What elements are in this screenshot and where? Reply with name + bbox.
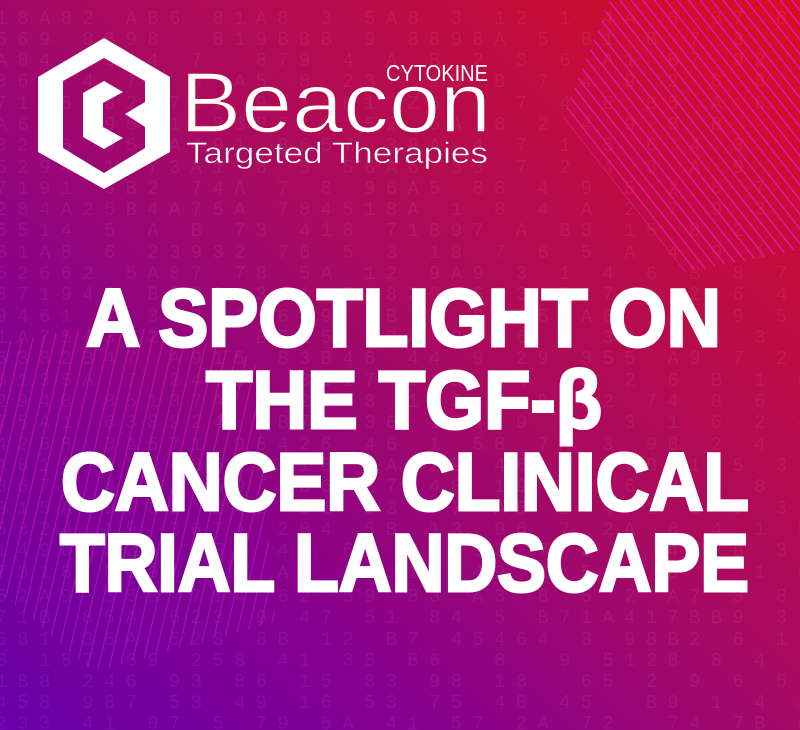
background pattern of faint characters: 294B 85137A 6 2948 153 7 B 22 74 8 6 3 [0, 391, 800, 413]
title: CANCER CLINICAL [61, 437, 749, 528]
title: A SPOTLIGHT ON [86, 273, 721, 364]
background pattern of faint characters: 6514 5 A B 73 418 71B97 A B3 15 8 2 [0, 220, 754, 242]
title [60, 273, 749, 609]
striped hexagon: bottom left [0, 326, 274, 671]
logo tagline: Targeted Therapies: Targeted Therapies [186, 137, 488, 170]
logo word: Cytokine: CYTOKINE [386, 60, 488, 86]
background pattern of faint characters: 7191 5B2 74A 7 8 96A5 88 4 9 5 2 6 7 [0, 178, 776, 200]
striped hexagon: top right [563, 0, 800, 272]
background pattern of faint characters: 18A82 AB6 81A8 3 5A8 3 12 1 4A 6 37 B2 [0, 8, 800, 30]
logo [38, 38, 491, 189]
background pattern of faint characters: 9461 7 358A2 649 1B73 8 25 A6 1 2 9 5 [0, 306, 797, 328]
icon: hexagon B mark [38, 38, 170, 189]
background pattern of faint characters: A64 295 1 83B71A 52 6A 8 2 4 9 3 B [0, 114, 732, 136]
background pattern of faint characters: 4268 3A571 98426 46 1 5B 7A 3 98 2 4 7 [0, 434, 800, 456]
title: THE TGF-β [206, 355, 602, 446]
background pattern of faint characters: 75A1 638924 5B7A 36 184 9 57 3 1 6 2 4 [0, 412, 800, 434]
background pattern of faint characters: 284A25B4A75A 784518A 1 8 4 A 2 7 9 3 [0, 199, 776, 221]
background pattern of faint characters: 1A75 392648 B715 32A 94 6 8 37 5 1 3 [0, 327, 776, 349]
background pattern of faint characters: 8135A 7 2469B 3817 5A6 24 38 2 6 B 1 6 [0, 370, 800, 392]
background pattern of faint characters: 6382B47 A915 83B46 44 9 29 355 A9 7 2 [0, 348, 797, 370]
background pattern of faint characters: 8276 35 A491 8657 38A 4 7 1 5 6 4 3 [0, 135, 754, 157]
background pattern of faint characters: 3 187 69 258 41 38 B6 8 9 5128 8 4 1 [0, 650, 800, 672]
background pattern of faint characters: 371948 B265 3A1 74829 6B3 5 7 A 2 6 4 [0, 284, 797, 306]
background pattern of faint characters: 5294 1 73A1 8 5 56A6 33 7 2 4 8 A 9 [0, 157, 754, 179]
background pattern of faint characters: 862 4 72 3 A5 8 23 1B B 7 4 9 2 6 8 [0, 71, 776, 93]
background pattern of faint characters: A84 1594 7 879 4 A B 2 3 6 A1 B7 92 [0, 50, 776, 72]
background pattern of faint characters: 7135 82 751 9B 461 Z6 3 7 4 E 85 A 6 [0, 93, 776, 115]
icon: inner B shape [83, 81, 123, 149]
logo word: Beacon: Beacon [180, 56, 491, 151]
background pattern of faint characters: 569 8B98 B19BBB 9 8898A 5 B1 B 7 3 [0, 29, 754, 51]
background pattern of faint characters: 52662 5A87 78 5A 12 9A9 3 1 4 6 B 8 7 [0, 263, 797, 285]
background pattern of faint characters: B1A8 6 23932 76 5 3 18 7 6 5 A 4 9 1 [0, 242, 776, 264]
